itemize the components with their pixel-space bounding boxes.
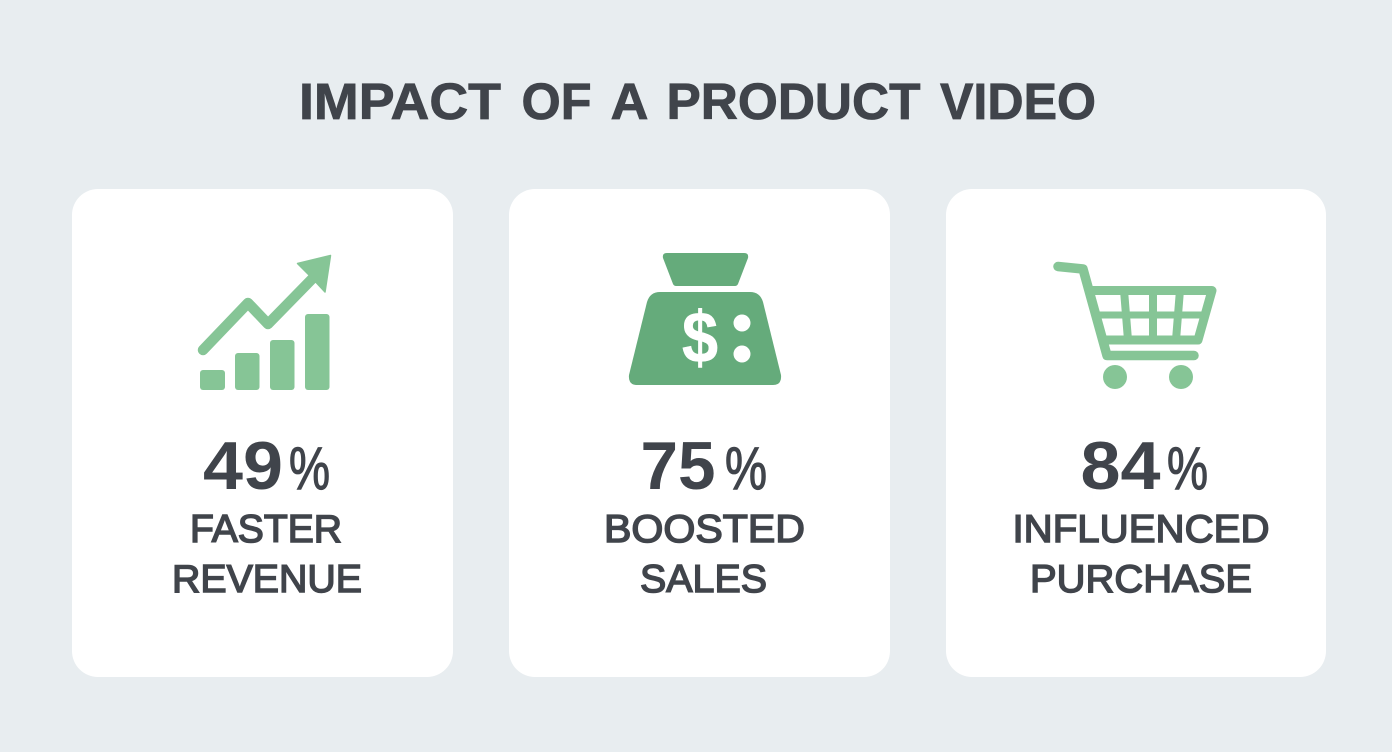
- label: faster revenue: [172, 508, 362, 601]
- label: influenced purchase: PURCHASE: [1030, 558, 1252, 601]
- icon: money bag scale: $: [682, 298, 718, 378]
- stat: 75%: %: [725, 435, 767, 502]
- panel: influenced purchase: [946, 189, 1326, 677]
- title: IMPACT: [299, 73, 501, 130]
- stat: 49%: [203, 428, 330, 504]
- panel: faster revenue: [72, 189, 453, 677]
- label: faster revenue: REVENUE: [172, 558, 362, 601]
- label: influenced purchase: [1012, 508, 1270, 601]
- icon: money bag scale: [629, 253, 781, 385]
- label: faster revenue: FASTER: [190, 508, 342, 551]
- icon: shopping cart: [1058, 266, 1212, 389]
- stat: 49%: %: [289, 435, 330, 502]
- label: boosted sales: SALES: [640, 558, 767, 601]
- title: PRODUCT: [666, 73, 920, 130]
- stat: 75%: [640, 428, 767, 504]
- stat: 75%: 75: [640, 428, 716, 504]
- label: boosted sales: BOOSTED: [604, 508, 805, 551]
- title: [299, 73, 1096, 130]
- title: VIDEO: [940, 73, 1096, 130]
- title: OF: [522, 73, 592, 130]
- panel: boosted sales: [509, 189, 890, 677]
- label: boosted sales: [604, 508, 805, 601]
- stat: 49%: 49: [203, 428, 283, 504]
- stat: 84%: 84: [1080, 428, 1161, 504]
- icon: rising bar chart with arrow: [200, 256, 330, 390]
- stat: 84%: [1080, 428, 1208, 504]
- title: A: [610, 73, 648, 130]
- label: influenced purchase: INFLUENCED: [1012, 508, 1270, 551]
- stat: 84%: %: [1167, 435, 1208, 502]
